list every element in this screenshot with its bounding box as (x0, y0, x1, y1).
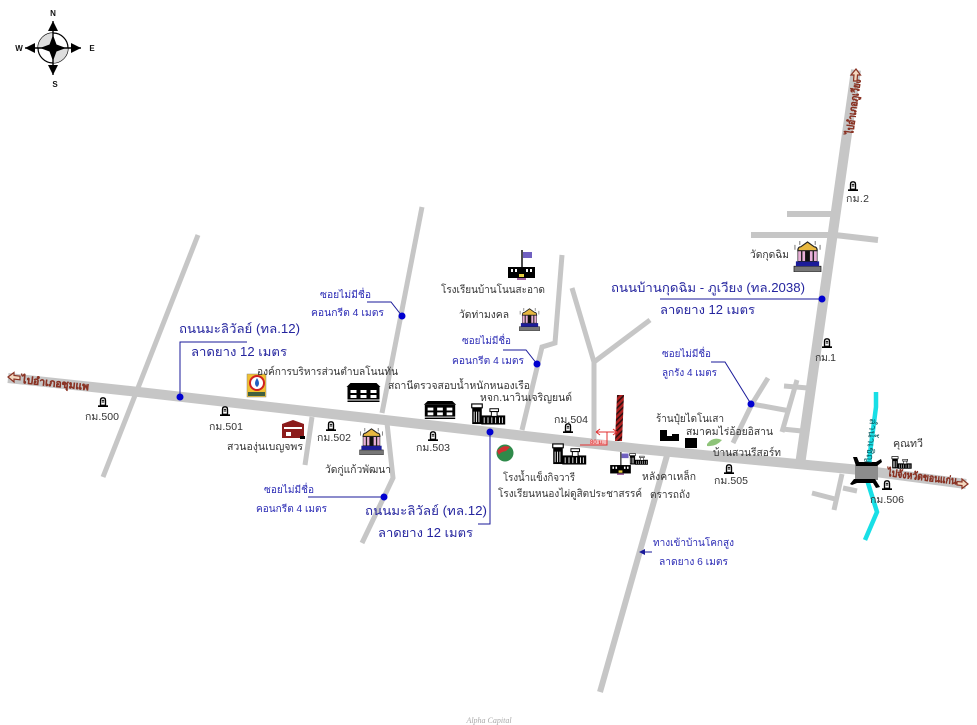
place labels: หลังคาเหล็ก (642, 469, 696, 483)
km labels: กม.506 (870, 494, 904, 506)
km labels: กม.505 (714, 475, 748, 487)
railway marker (615, 395, 624, 441)
callout: unnamed soi south: คอนกรีต 4 เมตร (256, 503, 328, 515)
callout: highway 12 centre (365, 428, 494, 540)
callout: highway 12 centre: ถนนมะลิวัลย์ (ทล.12) (365, 504, 487, 518)
place labels: สวนองุ่นเบญจพร (227, 441, 303, 453)
km labels: กม.501 (209, 421, 243, 433)
place labels: หจก.นาวินเจริญยนต์ (480, 391, 572, 404)
place labels (227, 249, 923, 501)
callout: highway 2038: ลาดยาง 12 เมตร (660, 303, 755, 317)
icon: red building (282, 420, 305, 439)
callout: Khok Sung entrance: ทางเข้าบ้านโคกสูง (653, 536, 734, 549)
km labels: กม.502 (317, 432, 351, 444)
river (865, 392, 877, 540)
callout: unnamed soi north (311, 287, 406, 320)
place labels: โรงน้ำแข็งกิจวารี (503, 470, 575, 484)
callout: highway 12 west: ลาดยาง 12 เมตร (191, 345, 287, 359)
direction label: Phu Wiang: ไปอำเภอภูเวียง (843, 78, 865, 136)
place labels: องค์การบริหารส่วนตำบลโนนทัน (257, 365, 398, 378)
compass: N (50, 9, 56, 18)
place labels: คุณทวี (893, 437, 923, 450)
distance marker: 80 ม. (590, 440, 604, 446)
callout: unnamed soi centre (452, 333, 540, 368)
icon: ice factory (496, 444, 514, 462)
place labels: วัดท่ามงคล (459, 309, 509, 321)
callout: highway 12 west: ถนนมะลิวัลย์ (ทล.12) (179, 322, 300, 336)
callout: unnamed soi laterite: ซอยไม่มีชื่อ (662, 346, 711, 360)
place labels: วัดกุดฉิม (750, 249, 789, 261)
callout: unnamed soi laterite (662, 346, 754, 408)
callout: unnamed soi north: คอนกรีต 4 เมตร (311, 307, 385, 319)
callout: Khok Sung entrance (639, 536, 734, 568)
callout: highway 2038: ถนนบ้านกุดฉิม - ภูเวียง (ทล.2038) (611, 281, 805, 296)
compass: S (52, 80, 58, 89)
direction label: Chum Phae: ไปอำเภอชุมแพ (20, 373, 90, 394)
bridge (850, 457, 882, 488)
compass: W (15, 44, 23, 53)
place labels: วัดกู่แก้วพัฒนา (325, 464, 391, 476)
callout: highway 12 centre: ลาดยาง 12 เมตร (378, 526, 473, 540)
callout: unnamed soi centre: ซอยไม่มีชื่อ (462, 333, 511, 347)
temple icons (360, 241, 821, 455)
callout: highway 2038 (611, 281, 826, 317)
callout: unnamed soi laterite: ลูกรัง 4 เมตร (662, 368, 718, 379)
river label: ลำน้ำเชิญ (863, 418, 881, 464)
compass (15, 9, 95, 89)
compass: E (89, 44, 95, 53)
direction label: Khon Kaen: ไปจังหวัดขอนแก่น (886, 466, 958, 488)
place labels: โรงเรียนบ้านโนนสะอาด (441, 283, 545, 296)
callout: unnamed soi centre: คอนกรีต 4 เมตร (452, 355, 525, 367)
km labels: กม.2 (846, 193, 869, 205)
place labels: สถานีตรวจสอบน้ำหนักหนองเรือ (388, 378, 530, 392)
place labels: ร้านปุ๋ยไดโนเสา (656, 412, 724, 425)
km labels (85, 193, 904, 506)
km markers (98, 182, 892, 489)
school icons (508, 250, 631, 475)
factory icons (472, 404, 912, 469)
place labels: สมาคมไร่อ้อยอิสาน (686, 425, 773, 438)
callout: Khok Sung entrance: ลาดยาง 6 เมตร (659, 557, 729, 568)
callout: highway 12 west (176, 322, 300, 400)
km labels: กม.504 (554, 414, 588, 426)
callout: unnamed soi south (256, 482, 388, 515)
distance marker (580, 429, 617, 446)
callout: unnamed soi south: ซอยไม่มีชื่อ (264, 482, 314, 496)
place labels: โรงเรียนหนองไผ่ดูสิตประชาสรรค์ (498, 487, 642, 500)
footer credit: Alpha Capital (465, 716, 512, 725)
place labels: บ้านสวนรีสอร์ท (713, 446, 781, 459)
km labels: กม.500 (85, 411, 119, 423)
hall icons (346, 383, 457, 419)
km labels: กม.1 (815, 352, 836, 364)
logo: subdistrict organisation (247, 374, 266, 397)
km labels: กม.503 (416, 442, 450, 454)
place labels: ตรารถถัง (650, 489, 690, 501)
callout: unnamed soi north: ซอยไม่มีชื่อ (320, 287, 371, 301)
shop icons (660, 430, 722, 448)
